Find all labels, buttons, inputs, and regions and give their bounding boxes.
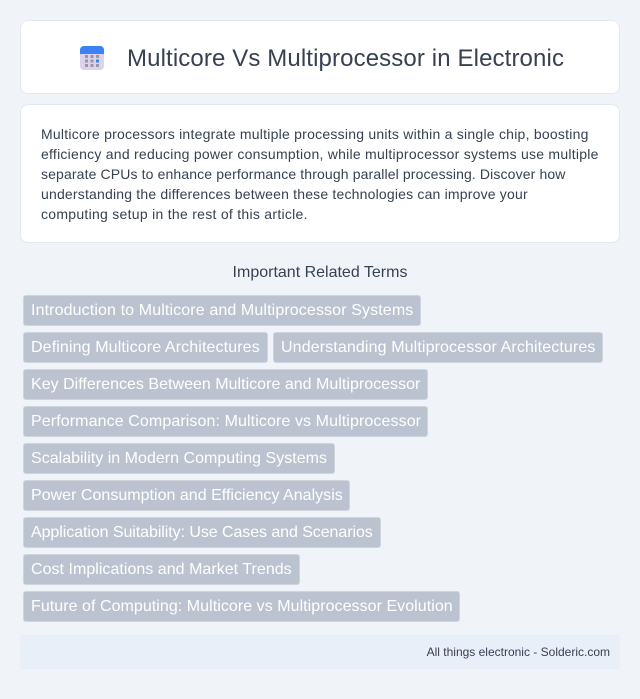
tag — [23, 517, 381, 548]
tag: Introduction to Multicore and Multiprocessor Systems — [31, 302, 413, 319]
tag: Defining Multicore Architectures — [31, 339, 260, 356]
intro paragraph: efficiency and reducing power consumption, while multiprocessor systems use multiple — [41, 146, 599, 162]
tag — [23, 443, 335, 474]
tag — [23, 406, 428, 437]
tag — [23, 591, 460, 622]
intro paragraph: Multicore processors integrate multiple processing units within a single chip, boosting — [41, 126, 589, 142]
intro paragraph: separate CPUs to enhance performance through parallel processing. Discover how — [41, 166, 566, 182]
tag list — [23, 295, 603, 622]
tag: Understanding Multiprocessor Architectures — [281, 339, 596, 356]
tag: Scalability in Modern Computing Systems — [31, 450, 327, 467]
tag — [23, 369, 428, 400]
intro paragraph: computing setup in the rest of this article. — [41, 206, 308, 222]
tag: Application Suitability: Use Cases and Scenarios — [31, 524, 373, 541]
tag: Power Consumption and Efficiency Analysis — [31, 487, 343, 504]
header panel — [20, 20, 620, 94]
tag — [23, 295, 421, 326]
tag — [23, 554, 300, 585]
tag: Key Differences Between Multicore and Multiprocessor — [31, 376, 420, 393]
intro paragraph: understanding the differences between these technologies can improve your — [41, 186, 528, 202]
tag: Cost Implications and Market Trends — [31, 561, 292, 578]
tag: Performance Comparison: Multicore vs Multiprocessor — [31, 413, 421, 430]
tag — [23, 332, 268, 363]
intro paragraph — [41, 126, 599, 222]
panel: introduction text — [20, 104, 620, 243]
tag — [23, 480, 350, 511]
heading: important related terms: Important Related Terms — [233, 264, 407, 281]
title: Multicore Vs Multiprocessor in Electronic — [127, 45, 564, 72]
tag: Future of Computing: Multicore vs Multiprocessor Evolution — [31, 598, 453, 615]
tag — [273, 332, 603, 363]
footer — [20, 635, 620, 669]
icon: calendar chip — [80, 46, 104, 70]
footer credit: All things electronic - Solderic.com — [427, 645, 610, 659]
